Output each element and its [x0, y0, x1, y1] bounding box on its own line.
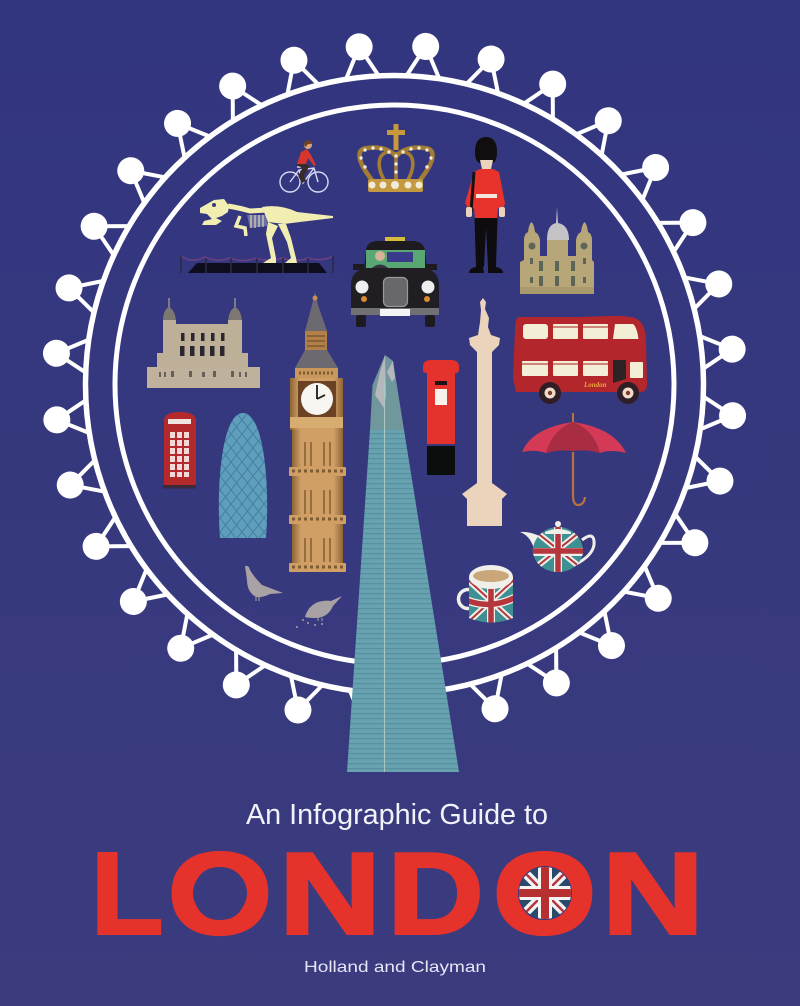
icon: double decker bus: London [583, 381, 607, 389]
inner ring [115, 105, 674, 664]
title: LONDON: D [387, 830, 484, 959]
icon: black taxi [351, 237, 439, 327]
first O counter [193, 867, 247, 919]
icon: dinosaur skeleton [181, 199, 333, 273]
icon: union flag teapot [520, 521, 594, 574]
museum platform [181, 256, 333, 273]
authors: Holland and Clayman [304, 959, 486, 976]
icon: st pauls cathedral [520, 207, 594, 294]
title: LONDON: O [168, 828, 272, 958]
icon: crown [359, 124, 433, 192]
title: LONDON [91, 828, 704, 959]
icon: big ben [289, 292, 346, 572]
icon: royal guard [465, 137, 505, 273]
icon: cyclist [280, 140, 328, 192]
subtitle: An Infographic Guide to [246, 799, 548, 831]
outer ring [86, 76, 704, 694]
icon: double decker bus [513, 316, 647, 404]
icon: tower of london [147, 298, 260, 388]
london eye wheel [39, 29, 749, 729]
icon: the shard [347, 355, 459, 772]
icon: gherkin building [219, 413, 267, 538]
icon: post box [423, 360, 459, 475]
title: LONDON: N [602, 829, 704, 959]
skeleton [200, 199, 333, 263]
icon: umbrella [522, 413, 626, 505]
wheel pods [39, 29, 749, 729]
icon: red telephone box [163, 412, 196, 488]
union flag roundel [518, 866, 572, 920]
title: LONDON: N [279, 829, 381, 959]
title: LONDON: L [91, 829, 163, 958]
icon: union flag mug [458, 565, 516, 626]
title: LONDON: O [493, 829, 596, 959]
icon: nelsons column [462, 298, 507, 526]
icon: pigeons [245, 566, 342, 628]
